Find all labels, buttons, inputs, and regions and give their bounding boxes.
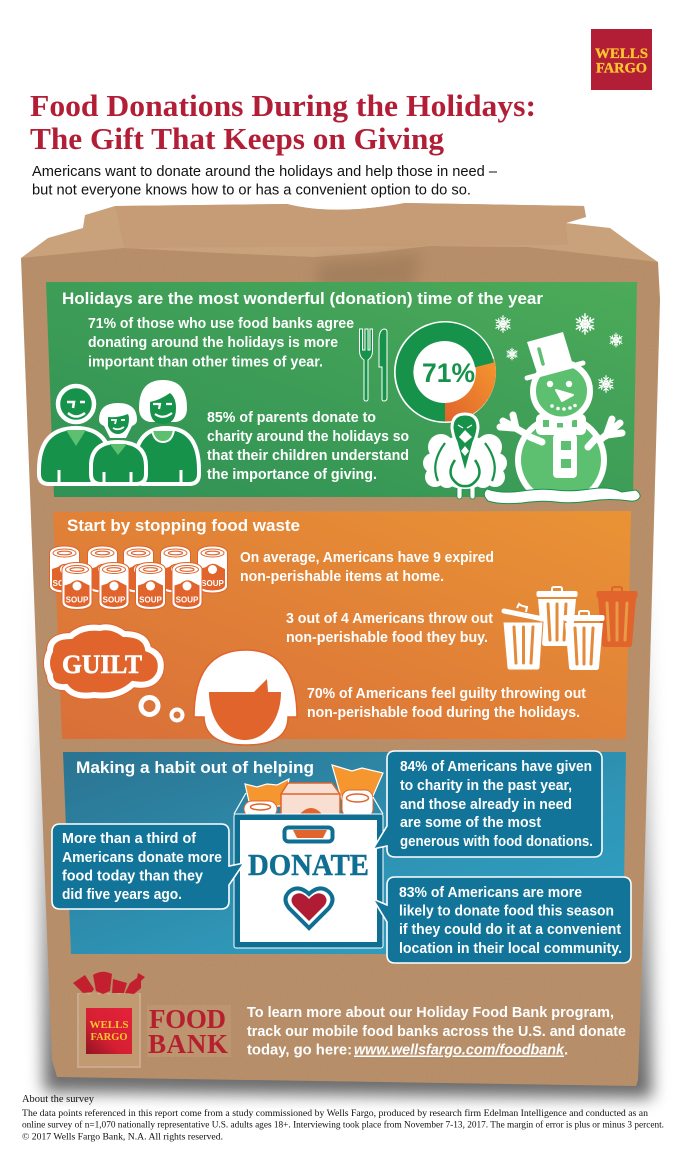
text: guilty stat: non-perishable food during the holidays. bbox=[307, 705, 580, 721]
icon: turkey bbox=[423, 414, 507, 499]
panel: habit (blue) bbox=[63, 752, 626, 954]
icons: soup cans bbox=[50, 546, 228, 610]
logo: food bank: BANK bbox=[148, 1029, 228, 1059]
icons: soup cans: SOUP bbox=[53, 579, 76, 588]
text: expired items stat: On average, Americans have 9 expired bbox=[240, 550, 494, 566]
text: call to action: today, go here: bbox=[247, 1042, 352, 1058]
callout: 84 percent: to charity in the past year, bbox=[400, 778, 572, 794]
text: expired items stat: non-perishable items at home. bbox=[240, 569, 444, 585]
text: expired items stat bbox=[240, 550, 494, 585]
text: call to action: To learn more about our Holiday Food Bank program, bbox=[247, 1004, 614, 1021]
heading: food waste: Start by stopping food waste bbox=[67, 516, 300, 535]
text: 85 percent stat: charity around the holidays so bbox=[207, 429, 409, 445]
text: about the survey: The data points referenced in this report come from a study commissioned by Wells Fargo, produced by research firm Edelman Intelligence and conducted as an bbox=[22, 1108, 648, 1119]
text: about the survey: © 2017 Wells Fargo Bank, N.A. All rights reserved. bbox=[22, 1132, 223, 1142]
text: call to action: www.wellsfargo.com/foodbank bbox=[354, 1042, 565, 1058]
text: about the survey: online survey of n=1,070 nationally representative U.S. adults ages 18+. Interviewing took place from November 7-13, 2017. The margin of error is plus or minus 3 percent. bbox=[22, 1120, 664, 1130]
callout: 84 percent bbox=[373, 751, 602, 857]
text: about the survey: About the survey bbox=[22, 1094, 95, 1105]
icons: soup cans: SOUP bbox=[176, 596, 199, 604]
text: 85 percent stat: the importance of giving. bbox=[207, 467, 377, 483]
text: 71 percent stat: important than other times of year. bbox=[88, 354, 323, 370]
text: call to action bbox=[247, 1004, 626, 1058]
text: about the survey bbox=[22, 1094, 664, 1142]
logo: Wells Fargo: FARGO bbox=[596, 60, 647, 76]
text: call to action: track our mobile food banks across the U.S. and donate bbox=[247, 1023, 626, 1040]
text: throw out stat: 3 out of 4 Americans throw out bbox=[286, 611, 493, 627]
icon: snowman bbox=[484, 332, 640, 504]
icons: soup cans: SOUP bbox=[66, 596, 89, 604]
callout: 84 percent: generous with food donations. bbox=[400, 834, 593, 850]
text: guilty stat: 70% of Americans feel guilty throwing out bbox=[307, 686, 586, 702]
heading: habit: Making a habit out of helping bbox=[76, 758, 314, 777]
icons: snowflakes bbox=[495, 314, 623, 392]
icon: guilt thought cloud bbox=[47, 627, 182, 720]
text: 85 percent stat: that their children understand bbox=[207, 448, 409, 464]
donut chart: 71 percent: 71% bbox=[422, 358, 475, 388]
icons: soup cans: SOUP bbox=[103, 596, 126, 604]
icon: donation box: DONATE bbox=[248, 847, 369, 882]
callout: 84 percent: are some of the most bbox=[400, 815, 541, 831]
logo: food bank: FARGO bbox=[90, 1032, 128, 1043]
text: 71 percent stat: donating around the holidays is more bbox=[88, 335, 338, 351]
icon: guilty face bbox=[194, 650, 297, 745]
text: 71 percent stat: 71% of those who use food banks agree bbox=[88, 316, 354, 332]
logo: Wells Fargo: WELLS bbox=[595, 46, 648, 62]
callout: more than a third: food today than they bbox=[62, 868, 204, 884]
text: throw out stat bbox=[286, 611, 493, 646]
subtitle bbox=[32, 163, 498, 198]
text: call to action: . bbox=[564, 1042, 568, 1058]
logo: food bank: FOOD bbox=[149, 1004, 226, 1034]
text: 85 percent stat: 85% of parents donate to bbox=[207, 410, 376, 426]
icon: guilt thought cloud: GUILT bbox=[62, 650, 142, 679]
heading: holidays: Holidays are the most wonderful (donation) time of the year bbox=[62, 289, 543, 308]
icon: donation box bbox=[234, 765, 383, 948]
icon: family bbox=[39, 380, 199, 484]
callout: 83 percent: if they could do it at a convenient bbox=[399, 922, 621, 938]
logo: Wells Fargo bbox=[591, 29, 652, 90]
callout: more than a third: More than a third of bbox=[62, 831, 196, 847]
callout: 84 percent: and those already in need bbox=[400, 797, 572, 813]
donut chart: 71 percent bbox=[394, 321, 496, 423]
subtitle: Americans want to donate around the holidays and help those in need – bbox=[32, 163, 498, 180]
text: 71 percent stat bbox=[88, 316, 354, 370]
callout: 83 percent bbox=[373, 877, 631, 963]
title: The Gift That Keeps on Giving bbox=[30, 121, 444, 156]
panel: food waste (orange) bbox=[53, 511, 631, 739]
callout: 83 percent: likely to donate food this season bbox=[399, 904, 614, 920]
icons: trash bins bbox=[503, 587, 638, 670]
callout: more than a third: Americans donate more bbox=[62, 850, 222, 866]
title: Food Donations During the Holidays: bbox=[30, 88, 536, 123]
icon: fork bbox=[360, 329, 372, 401]
callout: 84 percent: 84% of Americans have given bbox=[400, 759, 592, 775]
text: 85 percent stat bbox=[207, 410, 409, 483]
panel: holidays (green) bbox=[46, 282, 637, 497]
callout: more than a third bbox=[52, 824, 244, 909]
icon: knife bbox=[379, 329, 387, 401]
text: guilty stat bbox=[307, 686, 586, 721]
callout: 83 percent: location in their local community. bbox=[399, 941, 622, 957]
callout: more than a third: did five years ago. bbox=[62, 887, 182, 903]
logo: food bank bbox=[73, 972, 231, 1068]
icons: soup cans: SOUP bbox=[201, 579, 224, 588]
subtitle: but not everyone knows how to or has a convenient option to do so. bbox=[32, 182, 471, 198]
title bbox=[30, 88, 536, 156]
paper bag bbox=[21, 203, 660, 1098]
logo: food bank: WELLS bbox=[90, 1020, 129, 1031]
text: throw out stat: non-perishable food they buy. bbox=[286, 630, 488, 646]
callout: 83 percent: 83% of Americans are more bbox=[399, 885, 582, 901]
icons: soup cans: SOUP bbox=[139, 596, 162, 604]
